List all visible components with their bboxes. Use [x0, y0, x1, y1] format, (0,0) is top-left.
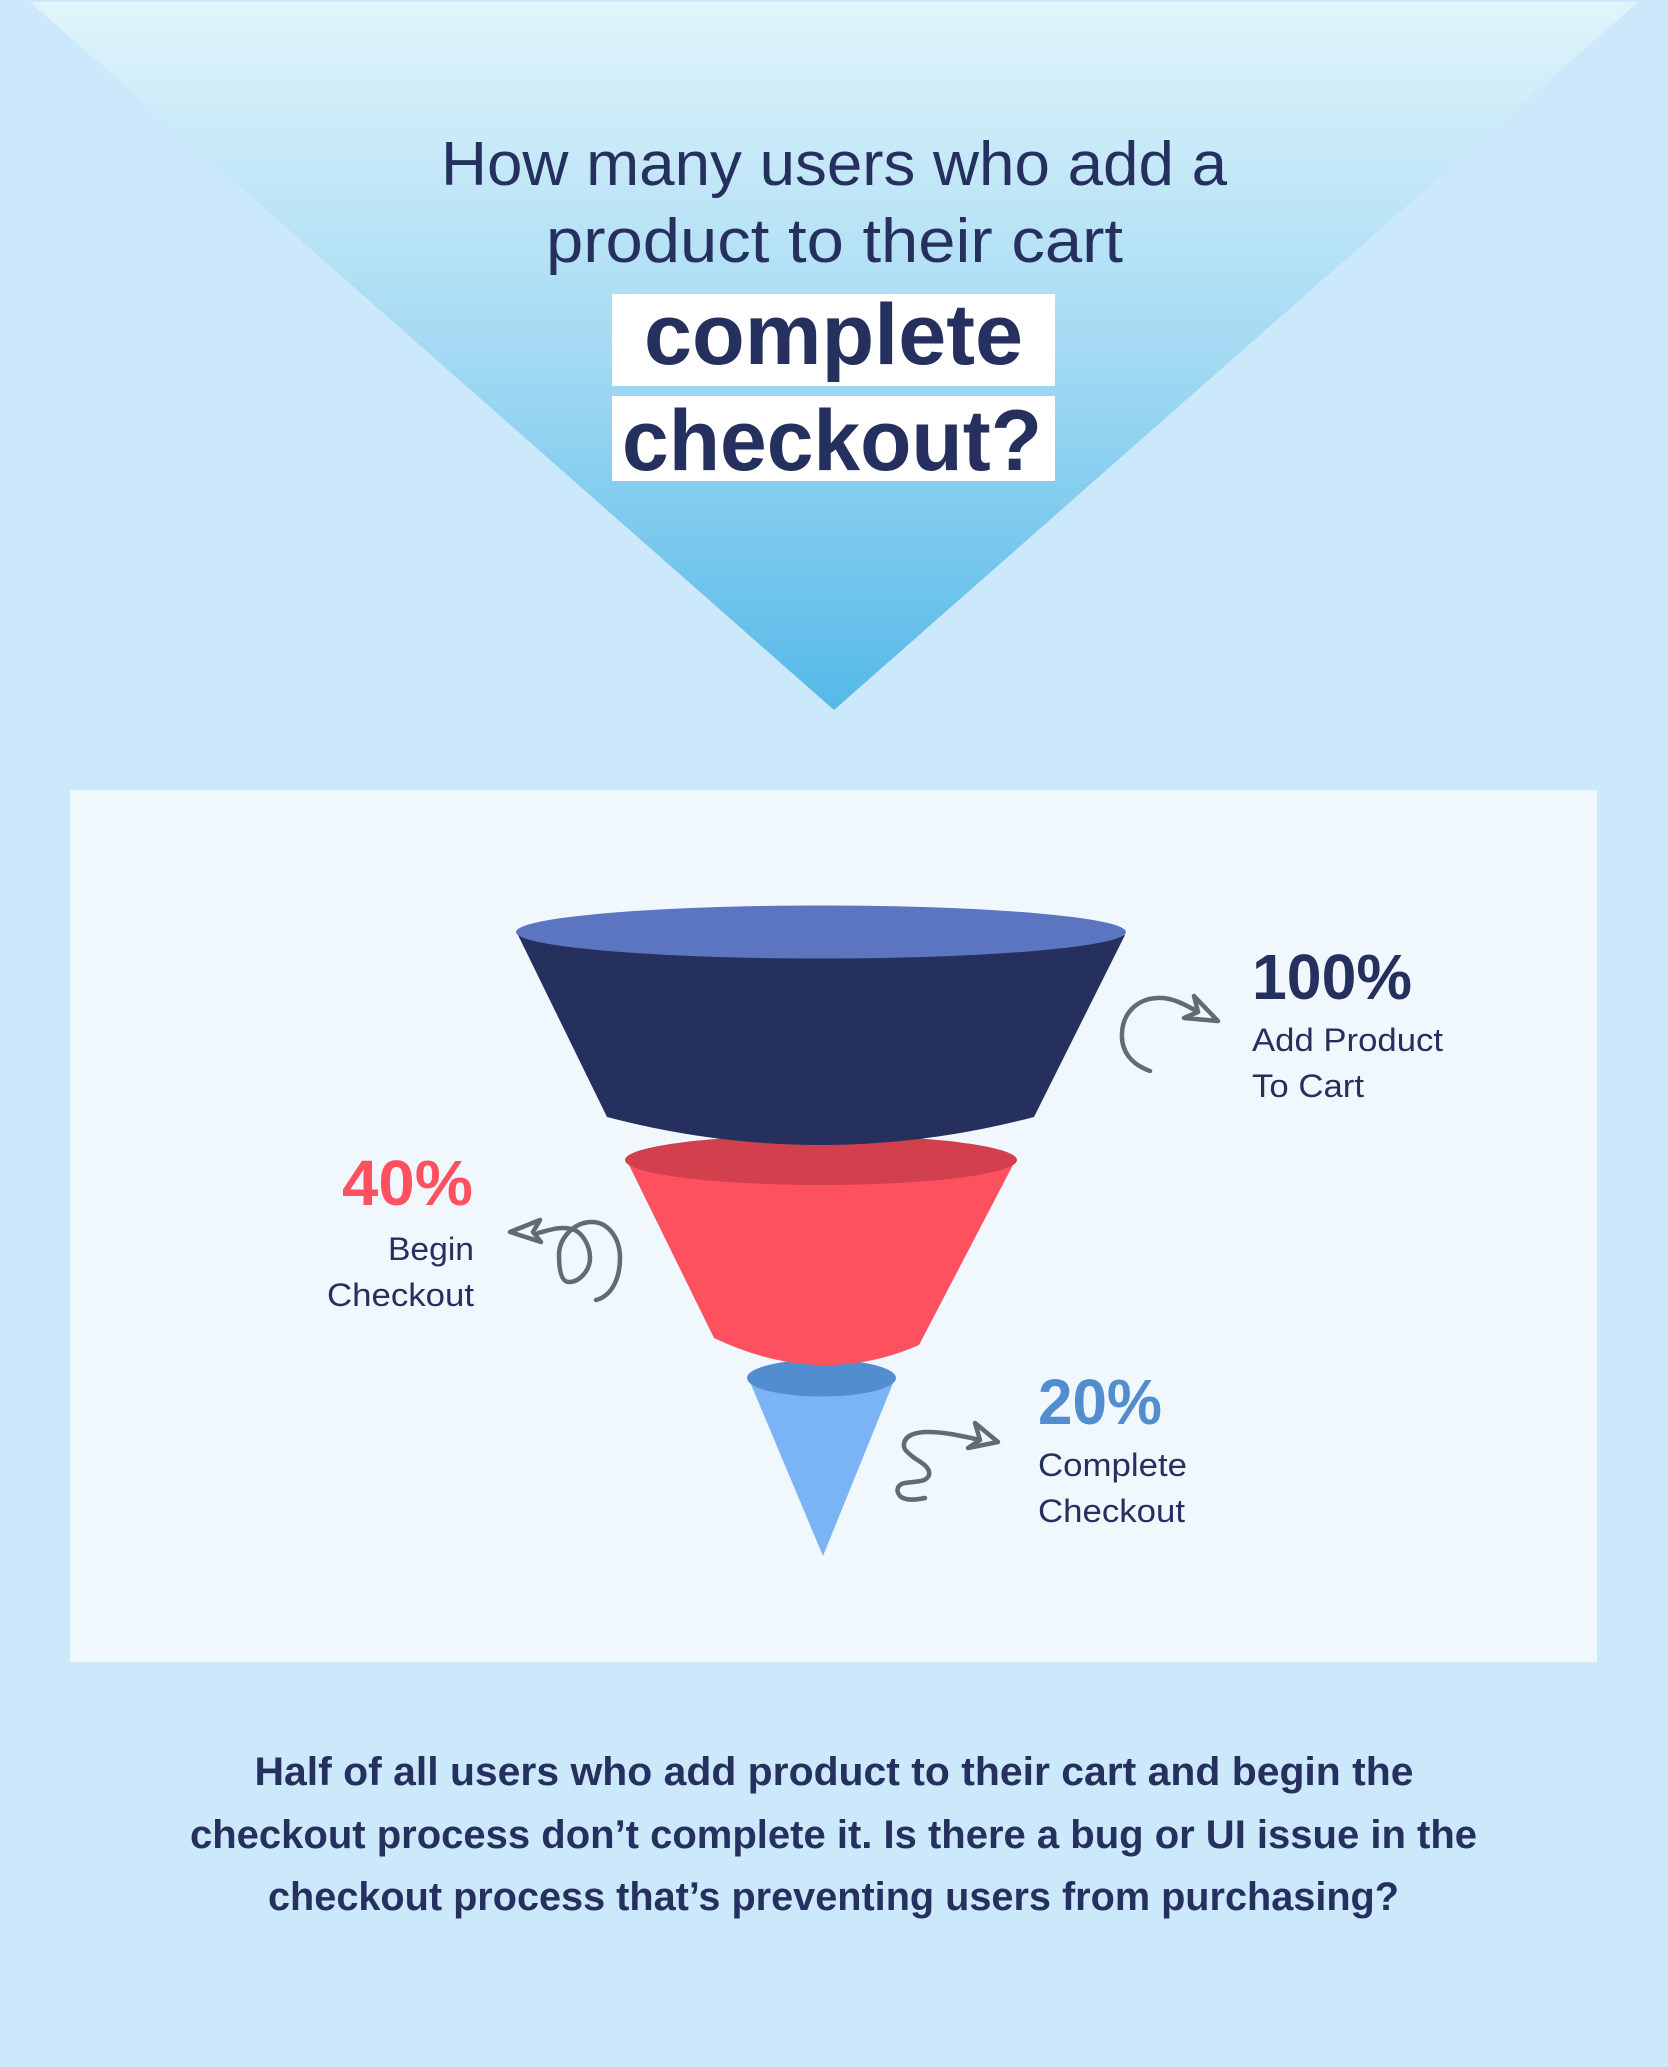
label: 20% complete checkout: 20% — [1038, 1366, 1162, 1438]
title — [441, 130, 1228, 489]
label: 40% begin checkout: 40% — [342, 1147, 473, 1219]
title: checkout? — [622, 393, 1042, 489]
footer text: checkout process don’t complete it. Is there a bug or UI issue in the — [190, 1813, 1477, 1857]
funnel stage: begin checkout — [625, 1135, 1017, 1365]
panel: funnel chart — [70, 790, 1597, 1662]
label: 40% begin checkout: Begin — [388, 1231, 474, 1267]
label: 100% add product to cart: Add Product — [1252, 1022, 1443, 1058]
label: 40% begin checkout — [327, 1147, 474, 1313]
title: complete — [644, 287, 1023, 383]
funnel stage: complete checkout cone — [747, 1360, 896, 1556]
label: 100% add product to cart: 100% — [1252, 941, 1412, 1013]
funnel stage: add product to cart — [516, 906, 1126, 1145]
header triangle — [30, 2, 1638, 710]
label: 20% complete checkout — [1038, 1366, 1187, 1529]
label: 20% complete checkout: Checkout — [1038, 1493, 1185, 1529]
label: 100% add product to cart — [1252, 941, 1443, 1104]
footer text — [190, 1750, 1477, 1919]
footer text: Half of all users who add product to their cart and begin the — [254, 1750, 1414, 1794]
label: 40% begin checkout: Checkout — [327, 1277, 474, 1313]
title: product to their cart — [546, 207, 1123, 276]
funnel — [516, 906, 1126, 1556]
arrow: to 100% label — [1122, 996, 1218, 1071]
title: How many users who add a — [441, 130, 1228, 199]
footer text: checkout process that’s preventing users from purchasing? — [268, 1875, 1399, 1919]
label: 100% add product to cart: To Cart — [1252, 1068, 1364, 1104]
arrow: to 20% label — [898, 1423, 998, 1500]
label: 20% complete checkout: Complete — [1038, 1447, 1187, 1483]
arrow: to 40% label — [510, 1220, 620, 1300]
